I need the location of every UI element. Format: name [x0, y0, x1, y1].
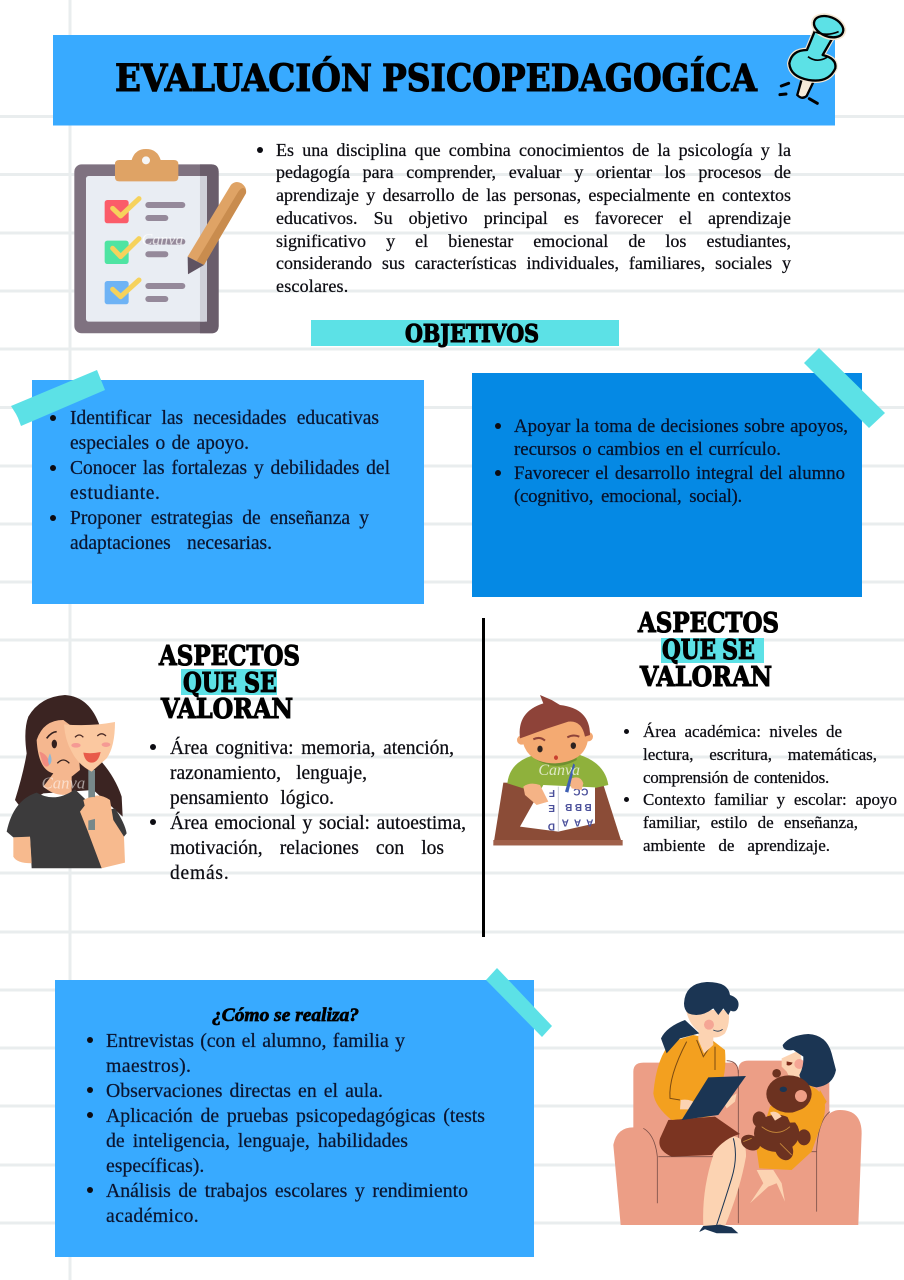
text block: introduction: pedagogía para comprender, evaluar y orientar los procesos de [276, 162, 791, 182]
illustration: girl holding smiling mask: Canva [42, 773, 85, 792]
illustration: boy writing at desk: F [549, 787, 555, 798]
text block: objetivos right list: (cognitivo, emocional, social). [514, 486, 742, 507]
heading: como se realiza: ¿Cómo se realiza? [212, 1005, 359, 1026]
illustration: boy writing at desk: C C [573, 785, 588, 796]
heading: aspectos right: ASPECTOS [637, 608, 779, 639]
illustration: boy writing at desk: B B B [565, 801, 592, 812]
text block: aspectos left list: pensamiento lógico. [170, 788, 334, 808]
text block: aspectos right list: Contexto familiar y escolar: apoyo [643, 790, 897, 809]
text block: objetivos right list: recursos o cambios en el currículo. [514, 439, 781, 460]
text block: objetivos left list: especiales o de apoyo. [70, 433, 249, 454]
text block: como se realiza list [87, 1030, 485, 1227]
text block: objetivos left list: Conocer las fortalezas y debilidades del [70, 458, 390, 479]
text block: introduction: aprendizaje y desarrollo de las personas, especialmente en contextos [276, 185, 791, 205]
text block: introduction: escolares. [276, 276, 348, 296]
text block: aspectos right list [624, 722, 897, 855]
text block: aspectos left list: razonamiento, lenguaje, [170, 762, 367, 784]
bullet [257, 146, 263, 152]
text block: objetivos right list: Apoyar la toma de decisiones sobre apoyos, [514, 416, 848, 437]
text block: objetivos left list: Identificar las necesidades educativas [70, 408, 379, 429]
icon: push pin [780, 11, 847, 103]
text block: aspectos right list: lectura, escritura, matemáticas, [643, 745, 877, 764]
panel: objetivos right [472, 373, 862, 597]
text block: aspectos right list: familiar, estilo de enseñanza, [643, 813, 858, 832]
text block: como se realiza list: Observaciones directas en el aula. [106, 1080, 383, 1102]
icon: clipboard checklist with pencil: Canva [142, 232, 183, 249]
icon: clipboard checklist with pencil [74, 149, 246, 333]
text block: objetivos left list: estudiante. [70, 483, 161, 504]
text block: objetivos left list: adaptaciones necesarias. [70, 533, 272, 554]
title banner [53, 35, 835, 126]
tape: bottom panel [486, 968, 552, 1037]
illustration: boy writing at desk: Canva [538, 762, 580, 779]
text block: introduction [257, 140, 792, 296]
text block: introduction: significativo y el bienestar emocional de los estudiantes, [276, 231, 791, 251]
illustration: boy writing at desk: D [548, 820, 555, 831]
heading: aspectos right [637, 608, 779, 693]
text block: aspectos right list: ambiente de aprendizaje. [643, 836, 830, 855]
objetivos heading [311, 319, 619, 348]
heading: aspectos right: QUE [662, 635, 716, 666]
text block: aspectos right list: comprensión de contenidos. [643, 768, 829, 787]
heading: aspectos left: QUE [183, 668, 237, 699]
vertical divider [482, 618, 485, 937]
text block: como se realiza list: académico. [106, 1205, 199, 1227]
title banner: PSICOPEDAGOGÍCA [382, 56, 758, 100]
heading: aspectos left: ASPECTOS [158, 641, 300, 672]
text block: como se realiza list: Entrevistas (con el alumno, familia y [106, 1030, 405, 1052]
illustration: boy writing at desk: E [548, 802, 555, 813]
text block: objetivos left list [50, 408, 390, 554]
text block: aspectos left list: Área emocional y social: autoestima, [170, 812, 466, 834]
title banner: EVALUACIÓN [115, 56, 372, 100]
tape: left panel [11, 370, 105, 426]
illustration: boy writing at desk [493, 695, 623, 845]
heading: aspectos right: SE [722, 635, 755, 666]
text block: introduction: Es una disciplina que combina conocimientos de la psicología y la [276, 140, 791, 160]
tape: right panel [804, 348, 885, 428]
illustration: boy writing at desk: A A A [562, 816, 593, 827]
text block: aspectos left list [150, 736, 466, 884]
illustration: girl holding smiling mask [7, 695, 127, 868]
text block: objetivos right list [495, 416, 848, 507]
text block: como se realiza list: de inteligencia, lenguaje, habilidades [106, 1130, 408, 1152]
text block: como se realiza list: Análisis de trabajos escolares y rendimiento [106, 1180, 468, 1202]
text block: aspectos left list: motivación, relaciones con los [170, 838, 444, 858]
text block: como se realiza list: maestros). [106, 1055, 191, 1077]
illustration: woman and child on sofa [613, 982, 862, 1233]
text block: aspectos left list: Área cognitiva: memoria, atención, [170, 738, 454, 758]
heading: aspectos right: VALORAN [639, 662, 772, 693]
text block: objetivos right list: Favorecer el desarrollo integral del alumno [514, 463, 845, 484]
heading: aspectos left [158, 641, 300, 725]
panel: como se realiza [55, 980, 534, 1257]
heading: aspectos left: SE [244, 668, 277, 699]
text block: introduction: educativos. Su objetivo principal es favorecer el aprendizaje [276, 208, 791, 228]
panel: objetivos left [32, 380, 424, 604]
text block: como se realiza list: Aplicación de pruebas psicopedagógicas (tests [106, 1105, 485, 1127]
text block: como se realiza list: específicas). [106, 1155, 204, 1177]
text block: objetivos left list: Proponer estrategias de enseñanza y [70, 508, 369, 529]
text block: introduction: considerando sus características individuales, familiares, sociales y [276, 253, 791, 273]
heading: aspectos left: VALORAN [160, 694, 293, 725]
text block: aspectos left list: demás. [170, 862, 230, 884]
objetivos heading: OBJETIVOS [405, 319, 539, 348]
text block: aspectos right list: Área académica: niveles de [643, 722, 842, 741]
